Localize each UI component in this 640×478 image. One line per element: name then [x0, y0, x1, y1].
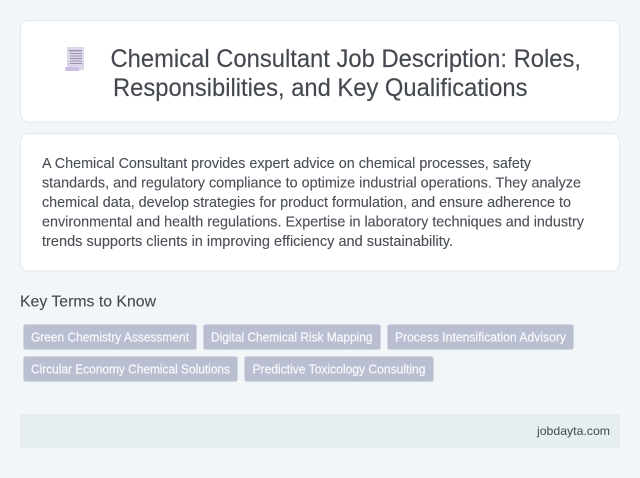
- panel: key term tags: [24, 324, 574, 382]
- footer bar: [20, 414, 620, 448]
- heading: title: [110, 45, 581, 102]
- tag: green chemistry: Green Chemistry Assessment: [31, 330, 189, 344]
- text block: description: environmental and health regulations. Expertise in laboratory techniques and industry: [42, 214, 585, 230]
- tag: digital risk mapping: Digital Chemical Risk Mapping: [211, 330, 373, 344]
- text block: description: trends supports clients in improving efficiency and sustainability.: [42, 234, 453, 250]
- panel: title card: [20, 20, 620, 122]
- tag: process intensification: [388, 324, 574, 350]
- tag: green chemistry: [24, 324, 196, 350]
- text block: description: chemical data, develop strategies for product formulation, and ensure adherence to: [42, 195, 571, 211]
- heading: key terms: Key Terms to Know: [20, 294, 156, 310]
- footer text: jobdayta.com: [536, 424, 610, 438]
- tag: digital risk mapping: [204, 324, 380, 350]
- tag: circular economy: Circular Economy Chemical Solutions: [31, 362, 230, 376]
- heading: title: Responsibilities, and Key Qualifications: [113, 74, 528, 102]
- tag: circular economy: [24, 356, 238, 382]
- text block: description: A Chemical Consultant provides expert advice on chemical processes, safety: [42, 156, 532, 172]
- tag: process intensification: Process Intensification Advisory: [395, 330, 567, 344]
- panel: description card: [20, 134, 620, 271]
- text block: description: standards, and regulatory compliance to optimize industrial operations. They analyze: [42, 176, 581, 192]
- tag: predictive toxicology: Predictive Toxicology Consulting: [252, 362, 426, 376]
- icon: document scroll: [65, 47, 84, 71]
- text block: description: [42, 156, 585, 250]
- heading: title: Chemical Consultant Job Description: Roles,: [110, 45, 581, 73]
- tag: predictive toxicology: [244, 356, 434, 382]
